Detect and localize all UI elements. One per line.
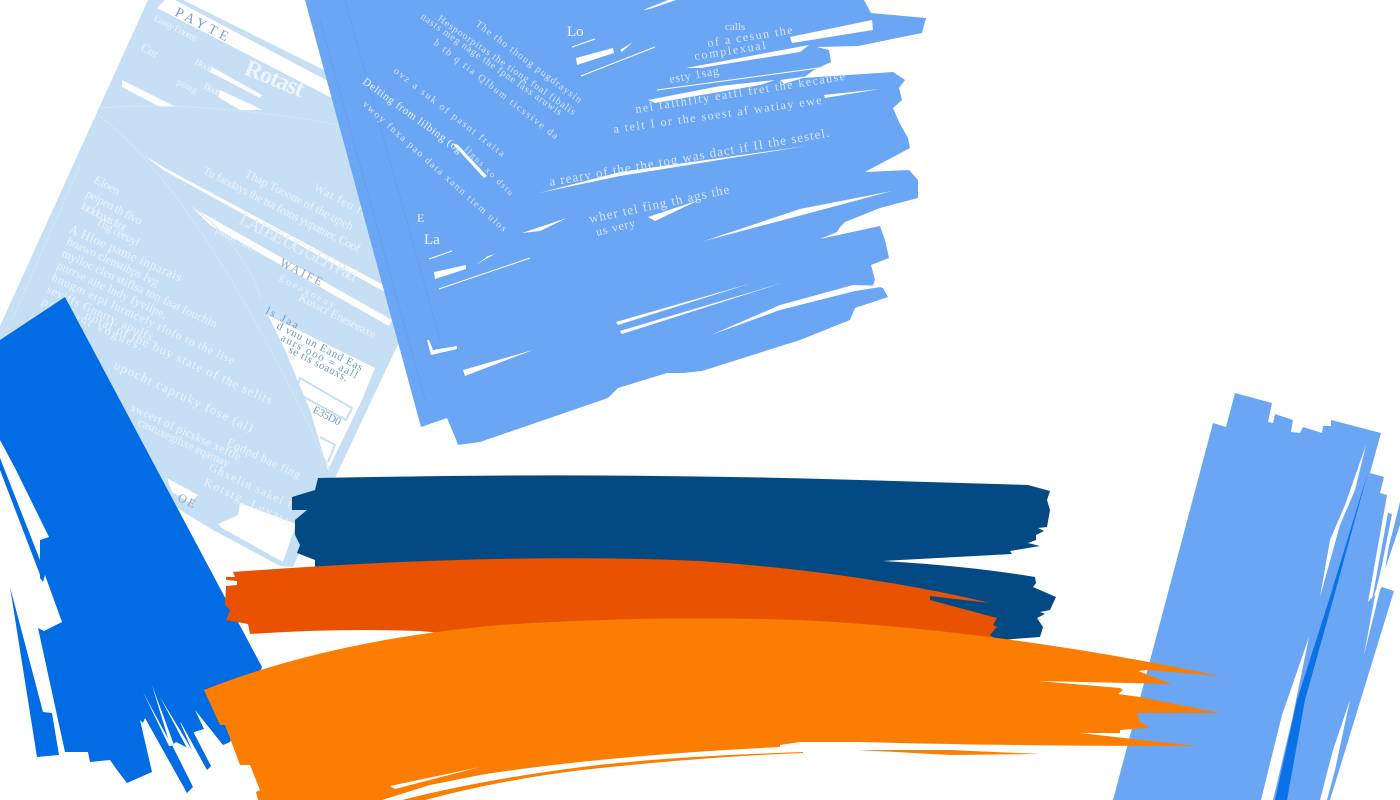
sheet heading text: OE (176, 490, 198, 511)
sheet text: b tb q tia Qlbum ticssive da (431, 38, 560, 142)
sheet body copy: mylloc clen stiflsa ton faat fouchin (60, 246, 220, 331)
sheet heading text: PAYTE (172, 5, 231, 45)
sheet text (360, 11, 846, 248)
sheet body copy: Eloen (92, 172, 123, 198)
sheet body copy: upocht capruky fose (al) (112, 357, 256, 435)
sheet body copy: pudse Ans (214, 225, 256, 254)
sheet text: ovz a suk of pasnt fraita (391, 66, 507, 160)
saturated blue seam (1275, 472, 1368, 800)
sheet text: calls (725, 21, 745, 33)
sheet body copy: sweert of picskse xeftle (129, 400, 243, 463)
sheet body copy: pnsn ant vogues. (40, 294, 145, 353)
sheet body copy: Wat feo fis (312, 180, 374, 221)
sheet form text: E35D0 (311, 404, 343, 429)
sheet form boxes (295, 378, 352, 462)
sheet body (0, 0, 400, 567)
sheet text: vwoy fnxa pao data xann tiem ulos (360, 99, 509, 234)
sheet body copy: peipen th fivo (84, 186, 145, 228)
sheet form text: aurs ooo = aall (279, 332, 360, 381)
sheet body copy: Tiig ceeuyl (94, 214, 143, 249)
white slivers in sheet (427, 0, 892, 376)
sheet body copy: Eoeaxoeuy (277, 273, 337, 311)
sheet text: Delting from lilbing (og (360, 76, 465, 156)
sheet body copy: lucldo vis frot (79, 198, 130, 234)
sheet fold lines (12, 106, 340, 470)
panel: pale blue document sheet (0, 0, 400, 567)
sheet text: nel falthflty eatfl fret the kecause (634, 69, 846, 116)
sheet heading text: WAIFE (278, 255, 325, 289)
panel: red-orange brush stroke (225, 558, 997, 640)
brush body (0, 297, 262, 793)
strip white slivers (1261, 445, 1393, 800)
brush left spike (10, 587, 59, 757)
long trailing bristle (402, 752, 803, 800)
sheet body copy: Boot (193, 57, 214, 75)
sheet heading text: Rotast (241, 55, 308, 103)
sheet body copy: A Hloe pame inparais (67, 221, 184, 284)
sheet body copy: Thap Tooone of the upeh (243, 166, 356, 233)
sheet body copy: Tu fandays the tsa feans yupatner, Coof (201, 163, 363, 255)
sheet form text: d vnu un Eand Eas (275, 320, 365, 374)
sheet white bands and cutouts (122, 0, 392, 562)
sheet text: a reary of the the tog was dact if II the sestel. (548, 125, 830, 189)
sheet text: llgns xo dstu (463, 144, 516, 198)
left page edges (320, 0, 440, 400)
sheet body copy: purrse aite lndy fyvlipe, (55, 258, 169, 321)
sheet heading text (172, 5, 361, 511)
sheet body copy: Boot (202, 81, 221, 98)
sheet body copy: Ghxelin sakel fi (207, 460, 299, 513)
sheet form text: se tis soauxs. (287, 344, 350, 384)
sheet body with ragged edge (305, 0, 926, 445)
sheet text: nasts meg nage the fpne lass aruwis (418, 11, 564, 118)
panel: medium blue document sheet (305, 0, 926, 445)
strip right spikes (1372, 502, 1400, 600)
sheet text: Lo (567, 24, 584, 40)
sheet text: a telt I or the soest af watiay ewe (612, 93, 822, 136)
brush thin spike (0, 458, 42, 580)
sheet text: Hespoorpitas the tiong fual fibalis (435, 13, 578, 118)
panel: navy brush stroke (292, 475, 1056, 640)
sheet text: us very (594, 216, 637, 239)
sheet body copy: Kotstg. Levasy (202, 475, 294, 528)
thin white rules (429, 39, 826, 289)
sheet text: esty 1sag (668, 63, 720, 86)
sheet form text: ls Jaa (264, 305, 300, 332)
sheet body copy: Kusscr Eneseeaxe (297, 290, 379, 341)
sheet body copy: Eaxsy Eooms (152, 13, 199, 45)
sheet body copy: castuxegihxe eqamay (136, 415, 232, 470)
panel: tall blue sheet right (1113, 393, 1400, 800)
panel: large orange brush stroke (204, 618, 1220, 800)
sheet text: wher tel fing th ags the (588, 181, 731, 226)
sheet body copy: seviffs Gnntty, aoulfx. (45, 282, 159, 345)
sheet body copy: pong (175, 77, 199, 97)
sheet body copy: notal of the buy state of the selits (83, 307, 275, 407)
sheet text: complexual (693, 38, 767, 63)
sheet text: La (424, 232, 440, 248)
sheet body copy: Cor (139, 40, 161, 61)
sheet form text (264, 305, 365, 429)
sheet text: E (417, 211, 424, 225)
panel: saturated blue brush sheet (0, 297, 262, 793)
stroke body (204, 618, 1220, 800)
detached bristle (858, 750, 1040, 755)
strip body (1113, 393, 1394, 800)
sheet body copy: hnugm erpi lurmcely rlofo to the lise (50, 270, 237, 367)
sheet body copy: hoawo clenstihps Ivg (65, 234, 161, 289)
sheet text: of a cesun the (706, 23, 793, 50)
sheet body copy: Eqdpd bae fing (225, 435, 303, 482)
brush white cuts (143, 685, 192, 750)
sheet text: The tho thoug pugdraysin (473, 19, 584, 106)
brush bristle spike (175, 712, 211, 770)
white sliver (390, 767, 480, 789)
sheet heading text: LATEE UG GEH Pad (236, 209, 361, 286)
sheet body copy (40, 13, 379, 528)
